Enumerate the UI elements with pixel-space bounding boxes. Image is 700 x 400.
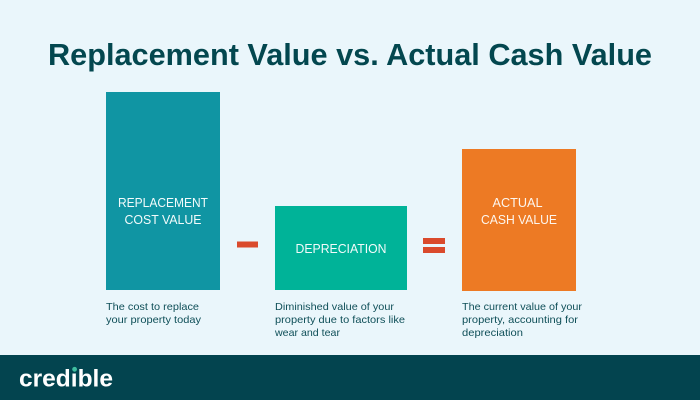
logo: credible: credible (19, 366, 113, 392)
text block: depreciation description (274, 301, 405, 339)
panel: actual cash value (462, 149, 576, 291)
panel: replacement cost value (106, 92, 220, 290)
panel: actual cash value: ACTUAL (492, 196, 543, 210)
text block: actual cash value description: depreciation (462, 327, 523, 339)
text block: depreciation description: property due to factors like (275, 314, 405, 326)
title: Replacement Value vs. Actual Cash Value (48, 37, 652, 72)
panel: replacement cost value: REPLACEMENT (118, 196, 208, 210)
text block: replacement cost description: your property today (106, 314, 202, 326)
text block: actual cash value description (462, 301, 583, 339)
icon: equals sign (423, 238, 445, 253)
footer band (0, 355, 700, 400)
text block: depreciation description: Diminished value of your (275, 301, 395, 313)
text block: replacement cost description: The cost to replace (106, 301, 199, 313)
icon: minus sign (237, 242, 258, 248)
text block: depreciation description: wear and tear (274, 327, 340, 339)
panel: depreciation (275, 206, 407, 290)
panel: replacement cost value: COST VALUE (124, 213, 202, 227)
text block: actual cash value description: property, accounting for (462, 314, 579, 326)
panel: actual cash value: CASH VALUE (481, 213, 557, 227)
text block: actual cash value description: The current value of your (462, 301, 583, 313)
panel: depreciation: DEPRECIATION (296, 242, 386, 256)
text block: replacement cost description (106, 301, 202, 326)
